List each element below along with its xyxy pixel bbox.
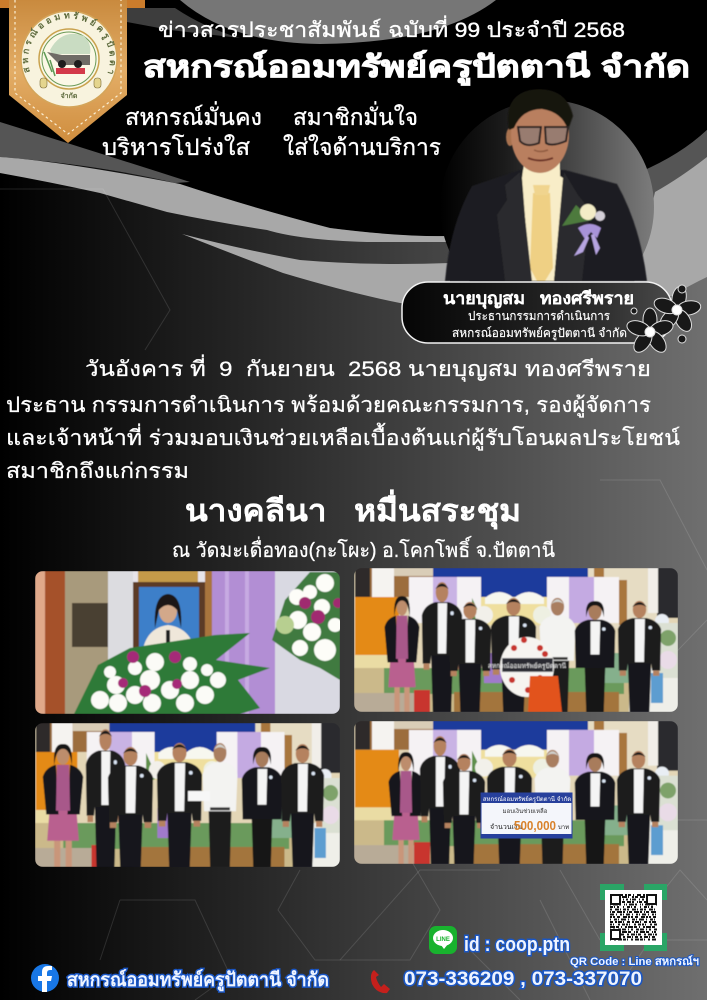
photo: group with wreath	[354, 568, 678, 712]
phone icon	[371, 970, 390, 993]
phone numbers: 073-336209 , 073-337070	[404, 969, 642, 990]
LINE id: id : coop.ptn	[464, 934, 570, 956]
chairman organisation: สหกรณ์ออมทรัพย์ครูปัตตานี จำกัด	[452, 326, 627, 341]
cheque board: บาท	[558, 825, 569, 831]
photo: presenting cheque board	[354, 721, 678, 864]
news body text: ประธาน กรรมการดำเนินการ พร้อมด้วยคณะกรรมการ, รองผู้จัดการ	[6, 394, 651, 418]
newsletter issue line: ข่าวสารประชาสัมพันธ์ ฉบับที่ 99 ประจำปี 2568	[158, 15, 625, 42]
cheque board	[481, 793, 572, 838]
venue: ณ วัดมะเดื่อทอง(กะโผะ) อ.โคกโพธิ์ จ.ปัตตานี	[172, 535, 555, 562]
organisation title: สหกรณ์ออมทรัพย์ครูปัตตานี จำกัด	[143, 50, 690, 86]
QR caption: QR Code : Line สหกรณ์ฯ	[570, 955, 699, 968]
portrait: chairman	[445, 89, 647, 281]
photo: portrait and flowers	[35, 571, 343, 714]
news body text: และเจ้าหน้าที่ ร่วมมอบเงินช่วยเหลือเบื้องต้นแก่ผู้รับโอนผลประโยชน์	[6, 423, 680, 451]
ribbon body	[9, 0, 127, 143]
portrait circle	[440, 100, 654, 314]
QR code	[600, 884, 667, 951]
facebook icon	[31, 964, 59, 992]
cheque board: มอบเงินช่วยเหลือ	[503, 807, 548, 815]
corsage	[562, 204, 605, 256]
black flowers	[625, 285, 702, 356]
news body text: สมาชิกถึงแก่กรรม	[6, 460, 189, 483]
news body text: วันอังคาร ที่ 9 กันยายน 2568 นายบุญสม ทองศรีพราย	[85, 354, 651, 382]
deceased member name: นางคลีนา หมื่นสระชุม	[185, 489, 521, 530]
slogan: สมาชิกมั่นใจ	[293, 101, 418, 130]
slogan: บริหารโปร่งใส	[102, 134, 250, 160]
cheque board: 500,000	[514, 818, 556, 833]
cooperative logo	[20, 10, 118, 106]
LINE icon	[429, 926, 457, 954]
ribbon top bar	[0, 0, 145, 8]
facebook name: สหกรณ์ออมทรัพย์ครูปัตตานี จำกัด	[67, 969, 329, 992]
cheque board: สหกรณ์ออมทรัพย์ครูปัตตานี จำกัด	[483, 795, 571, 803]
photo: group with wreath: สหกรณ์ออมทรัพย์ครูปัตตานี	[488, 662, 567, 670]
photo: handing over envelope	[35, 723, 340, 867]
cheque board: จำนวนเงิน	[490, 823, 522, 831]
news body text	[6, 354, 680, 483]
chairman role: ประธานกรรมการดำเนินการ	[468, 309, 611, 323]
slogan: ใส่ใจด้านบริการ	[283, 134, 441, 160]
LINE icon: LINE	[436, 937, 450, 943]
name plate	[402, 282, 672, 343]
cooperative logo: จำกัด	[61, 92, 78, 100]
slogan: สหกรณ์มั่นคง	[125, 101, 262, 130]
ribbon badge	[0, 0, 145, 143]
chairman name: นายบุญสม ทองศรีพราย	[443, 288, 634, 309]
slogan	[102, 101, 441, 160]
